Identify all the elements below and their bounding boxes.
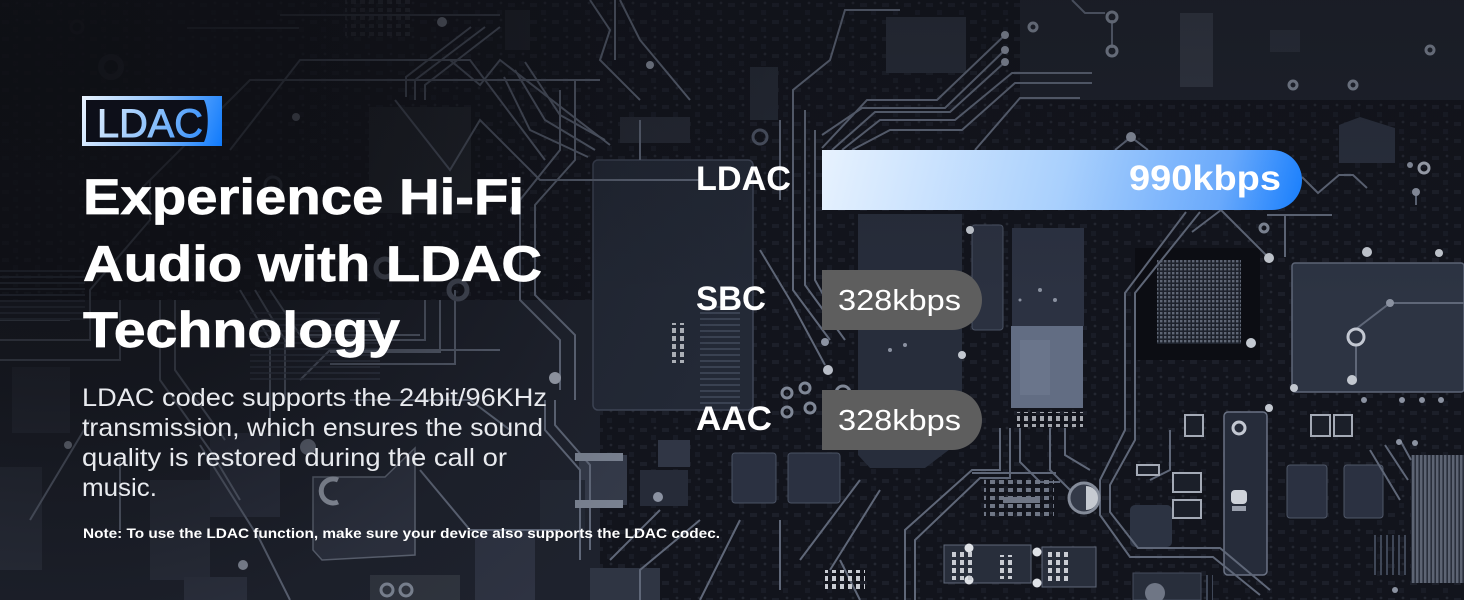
- heading: Technology: [83, 302, 400, 358]
- body text: quality is restored during the call or: [82, 444, 507, 472]
- bar row: AAC: 328kbps: [838, 405, 961, 437]
- note: Note: To use the LDAC function, make sure your device also supports the LDAC codec.: [83, 526, 720, 541]
- bar row: LDAC: 990kbps: [1129, 159, 1281, 198]
- heading: Audio with LDAC: [83, 236, 542, 292]
- LDAC badge: [82, 96, 222, 146]
- body text: [82, 384, 547, 502]
- bar row: AAC: AAC: [696, 400, 772, 438]
- bar row: SBC: SBC: [696, 280, 766, 318]
- heading: [83, 169, 542, 358]
- board: small parts: [1137, 415, 1352, 518]
- bar row: LDAC: [696, 150, 1302, 210]
- body text: transmission, which ensures the sound: [82, 414, 543, 442]
- bar chart: codec bitrates: [696, 150, 1302, 450]
- body text: music.: [82, 474, 157, 502]
- board: capacitor disc: [1069, 483, 1099, 513]
- bar row: AAC: [696, 390, 982, 450]
- bar row: LDAC: LDAC: [696, 160, 791, 198]
- bar row: SBC: 328kbps: [838, 285, 961, 317]
- body text: LDAC codec supports the 24bit/96KHz: [82, 384, 547, 412]
- heading: Experience Hi-Fi: [83, 169, 524, 225]
- LDAC badge: LDAC: [97, 102, 203, 146]
- bar row: SBC: [696, 270, 982, 330]
